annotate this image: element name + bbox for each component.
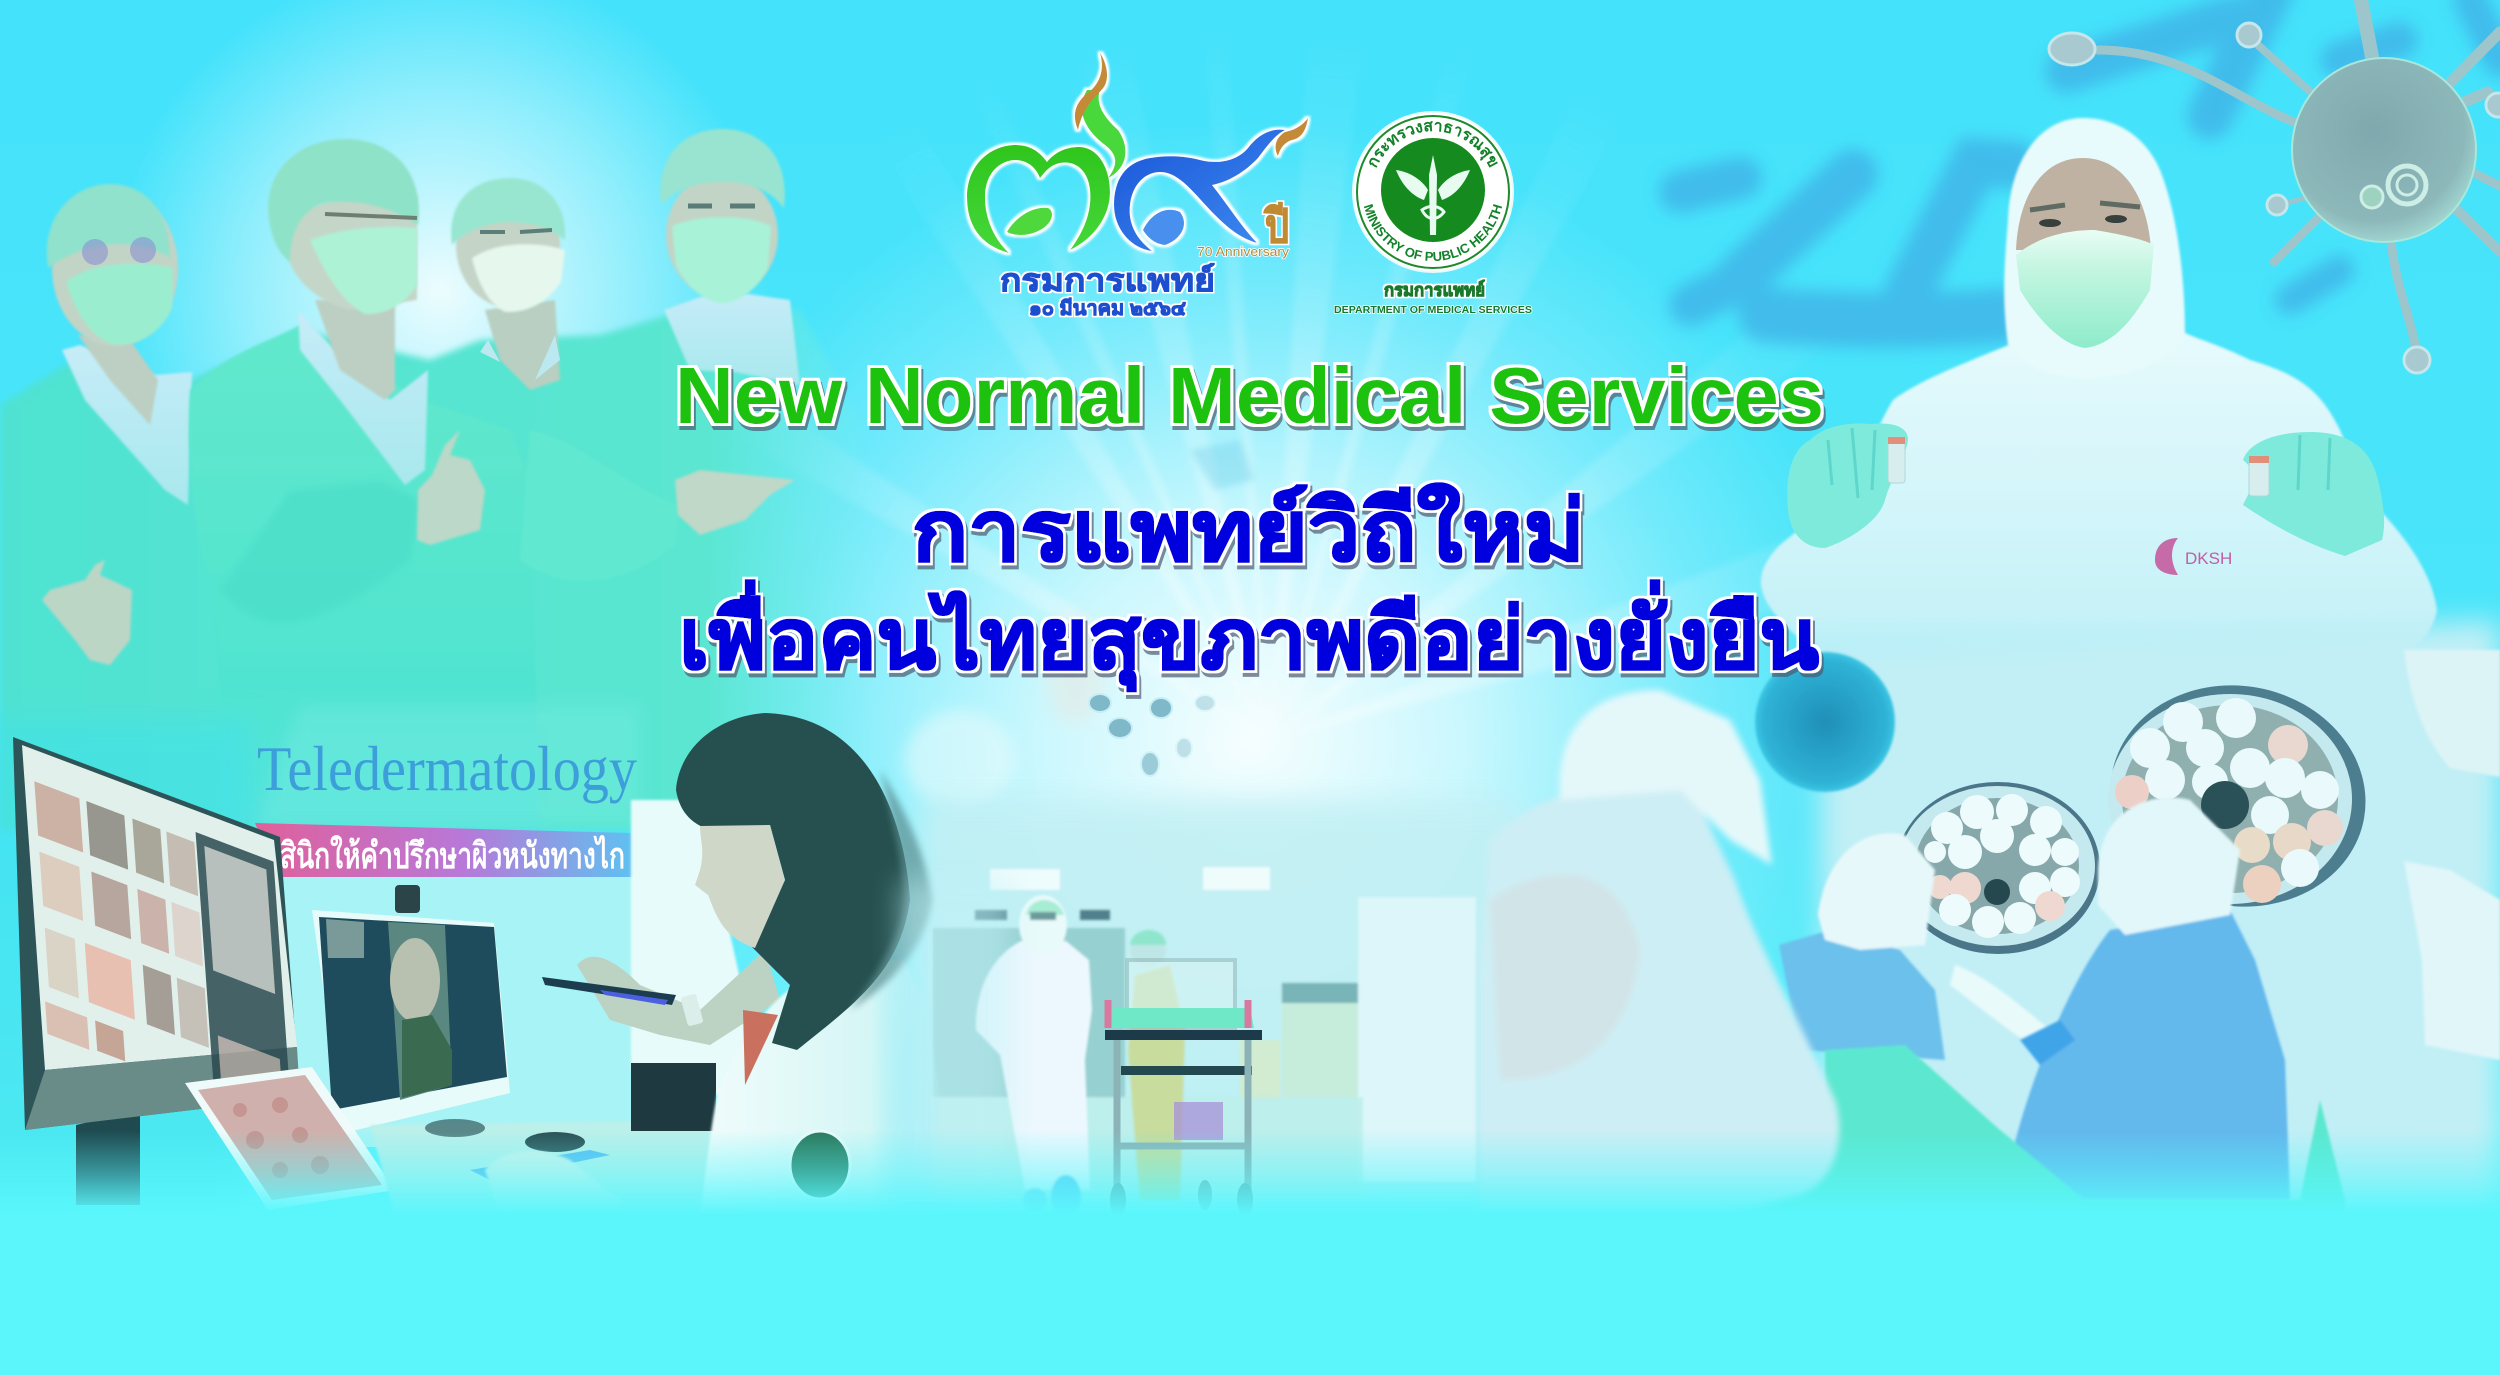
person with yellow gown: [1128, 930, 1185, 1200]
right glove and vial: [2243, 432, 2384, 556]
face: [695, 825, 785, 948]
tablet with skin lesion image: [185, 1067, 395, 1210]
person in white PPE: [976, 895, 1092, 1219]
desk and mouse: [370, 1119, 714, 1215]
large surgical lamp: [2093, 665, 2383, 927]
combined gown mass: [0, 300, 880, 830]
seal rings: [1353, 112, 1513, 272]
wall and side blend: [0, 705, 655, 1240]
doctor in white coat: [485, 713, 942, 1215]
background virus: [1755, 652, 1895, 792]
virus nucleus: [2361, 166, 2426, 208]
logo: 79th anniversary: [967, 53, 1308, 320]
DKSH logo on suit: DKSH: [2185, 549, 2232, 568]
photo: teledermatology consultation: [0, 705, 942, 1240]
pale room backdrop: [920, 800, 1520, 1210]
incubator on trolley: [1105, 960, 1262, 1217]
seal ring text: MINISTRY OF PUBLIC HEALTH: [1364, 204, 1502, 261]
virus spikes: [2098, 0, 2500, 356]
surgeon 1 blue gown and cap: [1779, 833, 2050, 1060]
hair: [676, 713, 910, 1050]
photo: hospital room with incubator trolley: [920, 694, 1520, 1219]
DKSH logo on suit: [2155, 538, 2232, 575]
left glove and vial: [1787, 423, 1908, 548]
English title: New Normal Medical Services: [675, 351, 1824, 440]
monitor thumbnails: [29, 769, 293, 1132]
virus body: [2292, 58, 2476, 242]
surgeon 2 blue gown and cap: [2013, 798, 2290, 1200]
DNA strand graphic: [1680, 0, 2500, 320]
Teledermatology sign text: Teledermatology: [257, 733, 637, 804]
floating pills: [1089, 694, 1215, 776]
coat badge: [790, 1131, 850, 1199]
standing assistant with smartphone: [542, 800, 780, 1131]
operating room wall: [1820, 620, 2500, 1215]
room wall and cabinets: [933, 867, 1476, 1197]
large PPE staff: [1480, 690, 1839, 1215]
department name in Thai: กรมการแพทย์: [1384, 279, 1485, 300]
caduceus emblem: [1396, 155, 1470, 235]
year label: ปี: [1263, 200, 1289, 252]
small surgical lamp: [1896, 782, 2100, 954]
anniversary date: ๑๐ มีนาคม ๒๕๖๔: [1029, 297, 1186, 320]
patient drape: [1727, 1045, 2345, 1215]
Thai title line 1: การแพทย์วิถีใหม่: [912, 483, 1585, 578]
doctor 3 (white mask): [451, 178, 565, 390]
doctor 1 (far left): [42, 184, 192, 665]
suit hood: [2004, 118, 2185, 378]
video call monitor: [312, 885, 510, 1133]
virus bulbs: [2049, 23, 2500, 373]
top right medical machine: [2404, 650, 2500, 777]
seal ring text: กระทรวงสาธารณสุข: [1369, 121, 1498, 168]
doctor 4 (far right): [660, 129, 800, 385]
numeral seven: [967, 53, 1125, 253]
right machine: [2404, 861, 2500, 1060]
pale ghost figure and vial behind title: [905, 710, 1015, 810]
clinic banner: [255, 823, 631, 877]
virus illustration: [2049, 0, 2500, 373]
doctor's hand on mouse: [485, 1151, 620, 1215]
bottom cyan fade band: [0, 1130, 2500, 1375]
photo: team of four doctors in green gowns: [0, 129, 880, 830]
face mask: [2016, 230, 2154, 348]
Thai title line 2: เพื่อคนไทยสุขภาพดีอย่างยั่งยืน: [679, 580, 1819, 692]
protective suit: [1761, 333, 2437, 770]
clinic banner: สินิกให้คำปรึกษาผิวหนังทางไก: [280, 834, 625, 876]
soft light blend right of doctor: [900, 880, 1010, 1210]
face: [2016, 158, 2151, 250]
seal ring text: [1364, 121, 1502, 261]
doctor 2 (centre): [189, 139, 795, 830]
photo: surgical team in operating room: [1480, 620, 2500, 1215]
anniversary label: 70 Anniversary: [1197, 244, 1290, 259]
department name in English: DEPARTMENT OF MEDICAL SERVICES: [1334, 304, 1532, 316]
logo: Ministry of Public Health seal: [1334, 111, 1532, 316]
numeral nine: [1114, 118, 1308, 251]
department name: กรมการแพทย์: [1000, 263, 1215, 298]
white coat: [700, 960, 942, 1215]
photo: researcher in white protective suit holding vials: [1761, 118, 2437, 770]
desktop monitor with skin images: [13, 737, 300, 1205]
